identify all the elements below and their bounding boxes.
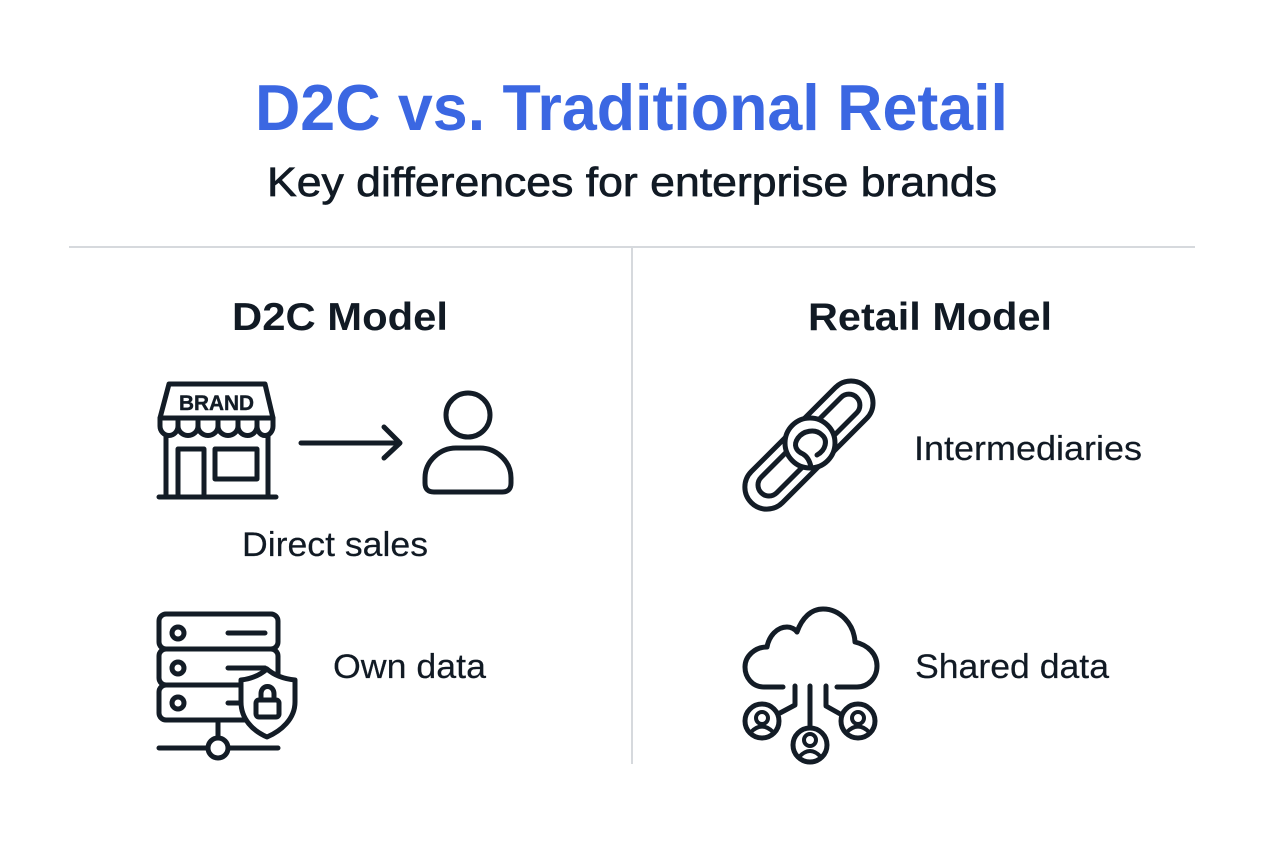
panel: Retail model (736, 296, 1142, 762)
panel: D2C model (159, 296, 511, 758)
label: Own data: Own data (333, 648, 486, 686)
icon: customer (425, 393, 511, 492)
label: Shared data: Shared data (915, 648, 1109, 686)
title: D2C vs. Traditional Retail (255, 71, 1008, 144)
subtitle: Key differences for enterprise brands (267, 159, 997, 205)
heading: Retail Model: Retail Model (808, 296, 1052, 339)
icon: chain links (736, 372, 882, 518)
icon: brand storefront (159, 384, 276, 497)
arrow: brand to customer (301, 427, 400, 458)
icon: shared cloud (745, 609, 877, 762)
label: Direct sales: Direct sales (242, 526, 428, 564)
store sign text: BRAND (179, 392, 254, 415)
heading: D2C Model: D2C Model (232, 296, 448, 339)
icon: secure server (159, 614, 295, 758)
label: Intermediaries: Intermediaries (914, 430, 1142, 468)
